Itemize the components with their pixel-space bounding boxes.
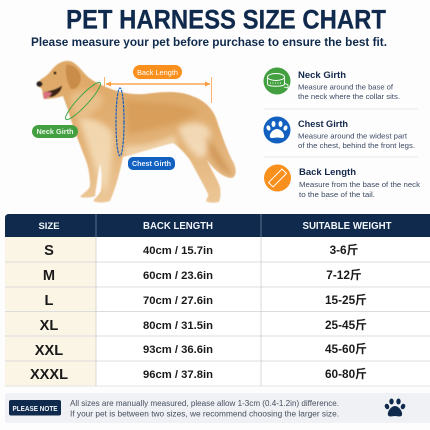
dog neck ruff [70, 90, 104, 118]
chest girth description: Measure around the widest part [298, 132, 408, 140]
back length description [299, 180, 420, 199]
dog tail feathering [206, 135, 234, 176]
dog pale chest [78, 118, 113, 195]
dog tongue [43, 92, 52, 99]
title: PET HARNESS SIZE CHART [66, 4, 386, 34]
neck girth ring [62, 79, 104, 123]
row XXXL: 96cm / 37.8in [143, 369, 213, 381]
subtitle: Please measure your pet before purchase to ensure the best fit. [31, 35, 387, 49]
please note badge [9, 400, 61, 416]
neck girth label: Neck Girth [36, 127, 74, 136]
chest girth heading: Chest Girth [298, 119, 348, 130]
row S: 3-6斤 [330, 243, 359, 257]
dog saddle shading [125, 100, 198, 134]
note text: All sizes are manually measured, please allow 1-3cm (0.4-1.2in) difference. [70, 399, 339, 408]
note text: If your pet is between two sizes, we recommend choosing the larger size. [70, 410, 339, 418]
row XXL: XXL [35, 343, 63, 359]
please note badge: PLEASE NOTE [12, 404, 58, 413]
chest girth label: Chest Girth [132, 159, 171, 168]
table header: SIZE [38, 221, 60, 232]
panel: measurement guide [264, 68, 420, 199]
row XXXL: XXXL [30, 367, 68, 383]
back length heading: Back Length [299, 167, 356, 178]
row M: 7-12斤 [326, 268, 362, 282]
table header: BACK LENGTH [143, 221, 213, 232]
chest girth description: of the chest, behind the front legs. [298, 141, 415, 150]
neck girth description [298, 82, 400, 101]
dog pale haunch [178, 123, 211, 158]
row M: M [43, 268, 55, 284]
neck girth heading: Neck Girth [298, 70, 346, 81]
dog eye [54, 72, 56, 74]
row L: 15-25斤 [325, 293, 367, 307]
table header [5, 214, 430, 237]
icon: paw [264, 116, 290, 144]
row L: 70cm / 27.6in [143, 295, 213, 307]
back length description: to the base of the tail. [299, 190, 375, 199]
row XXXL: 60-80斤 [325, 367, 367, 381]
note text [70, 399, 339, 418]
row M: 60cm / 23.6in [143, 270, 213, 282]
row XXL [35, 342, 367, 359]
chest girth description [298, 132, 415, 150]
dog pale belly [124, 134, 178, 158]
row S: 40cm / 15.7in [143, 245, 213, 257]
back length label: Back Length [137, 68, 178, 77]
icon: neck collar [264, 68, 290, 94]
row XXL: 45-60斤 [325, 342, 367, 356]
row XL: 25-45斤 [325, 318, 367, 332]
dog ear [66, 65, 81, 89]
back length description: Measure from the base of the neck [299, 180, 420, 189]
neck girth description: the neck where the collar sits. [298, 92, 400, 101]
back length arrow [104, 77, 212, 103]
back length label [133, 65, 182, 79]
size column background [5, 237, 96, 386]
icon: paw print [384, 398, 406, 416]
row M [43, 268, 362, 284]
table header: SUITABLE WEIGHT [302, 221, 392, 232]
size table [5, 214, 430, 386]
neck girth description: Measure around the base of [298, 82, 394, 92]
chest girth label [128, 157, 175, 170]
neck girth label [32, 125, 78, 138]
row XL: 80cm / 31.5in [143, 320, 213, 332]
row L [45, 293, 367, 309]
row S: S [44, 243, 54, 259]
dog photo [36, 61, 236, 203]
row XL: XL [40, 318, 58, 334]
row S [44, 243, 359, 259]
row L: L [45, 293, 54, 309]
dog nose [36, 81, 42, 87]
dog mouth [45, 86, 62, 97]
illustration: golden retriever with measurement marks [32, 61, 236, 203]
row XL [40, 318, 367, 334]
row XXXL [30, 367, 367, 383]
chest girth ring [116, 88, 124, 156]
row XXL: 93cm / 36.6in [143, 344, 213, 356]
note panel [5, 393, 430, 423]
icon: ruler [264, 164, 291, 192]
